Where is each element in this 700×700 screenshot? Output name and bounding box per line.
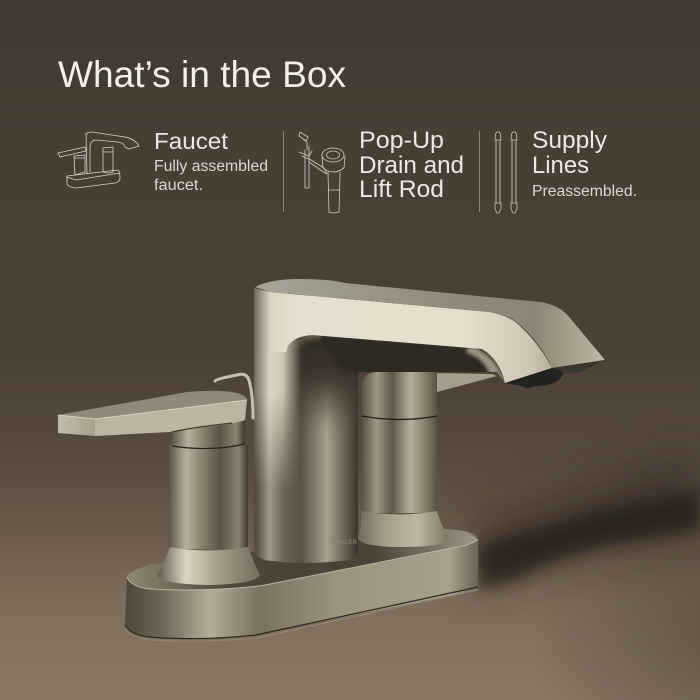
- title: What’s in the Box: [58, 53, 346, 95]
- right handle column: [362, 417, 437, 513]
- divider: [283, 131, 284, 212]
- right handle cap: [362, 372, 437, 419]
- item: pop-up drain and lift rod: [299, 127, 464, 213]
- left lever top: [58, 391, 247, 419]
- right handle: [358, 417, 449, 547]
- product photo: faucet: [58, 279, 605, 641]
- heading: supply lines: Supply: [532, 127, 607, 154]
- left handle cap: [172, 420, 245, 449]
- divider: [479, 131, 480, 212]
- lift rod: [215, 374, 253, 418]
- left handle column: [169, 445, 248, 549]
- right handle lever: [376, 372, 497, 392]
- item: supply lines: [495, 127, 637, 213]
- nozzle underside: [552, 360, 605, 374]
- right handle flare: [358, 511, 449, 547]
- heading: supply lines: Lines: [532, 152, 589, 179]
- logo mark: KOHLER: [330, 540, 358, 546]
- spout top surface: [255, 279, 605, 368]
- heading: pop-up drain and lift rod: Drain and: [359, 152, 464, 179]
- main body and spout: [254, 279, 605, 570]
- description: faucet: faucet.: [154, 177, 203, 194]
- deck plate: [125, 529, 478, 641]
- heading: pop-up drain and lift rod: Lift Rod: [359, 176, 444, 203]
- left handle: [58, 391, 260, 585]
- heading: faucet: Faucet: [154, 128, 228, 154]
- icon: faucet line drawing: [58, 132, 139, 188]
- aerator: [505, 368, 563, 388]
- heading: pop-up drain and lift rod: Pop-Up: [359, 127, 444, 154]
- item: faucet: [58, 128, 268, 194]
- body column and spout front: [254, 280, 552, 570]
- icon: supply lines line drawing: [495, 132, 517, 213]
- description: supply lines: Preassembled.: [532, 183, 637, 200]
- description: faucet: Fully assembled: [154, 158, 268, 175]
- icon: drain and lift rod line drawing: [299, 132, 345, 213]
- left lever tip: [58, 415, 95, 436]
- left handle flare: [157, 547, 260, 585]
- left lever front: [95, 400, 247, 436]
